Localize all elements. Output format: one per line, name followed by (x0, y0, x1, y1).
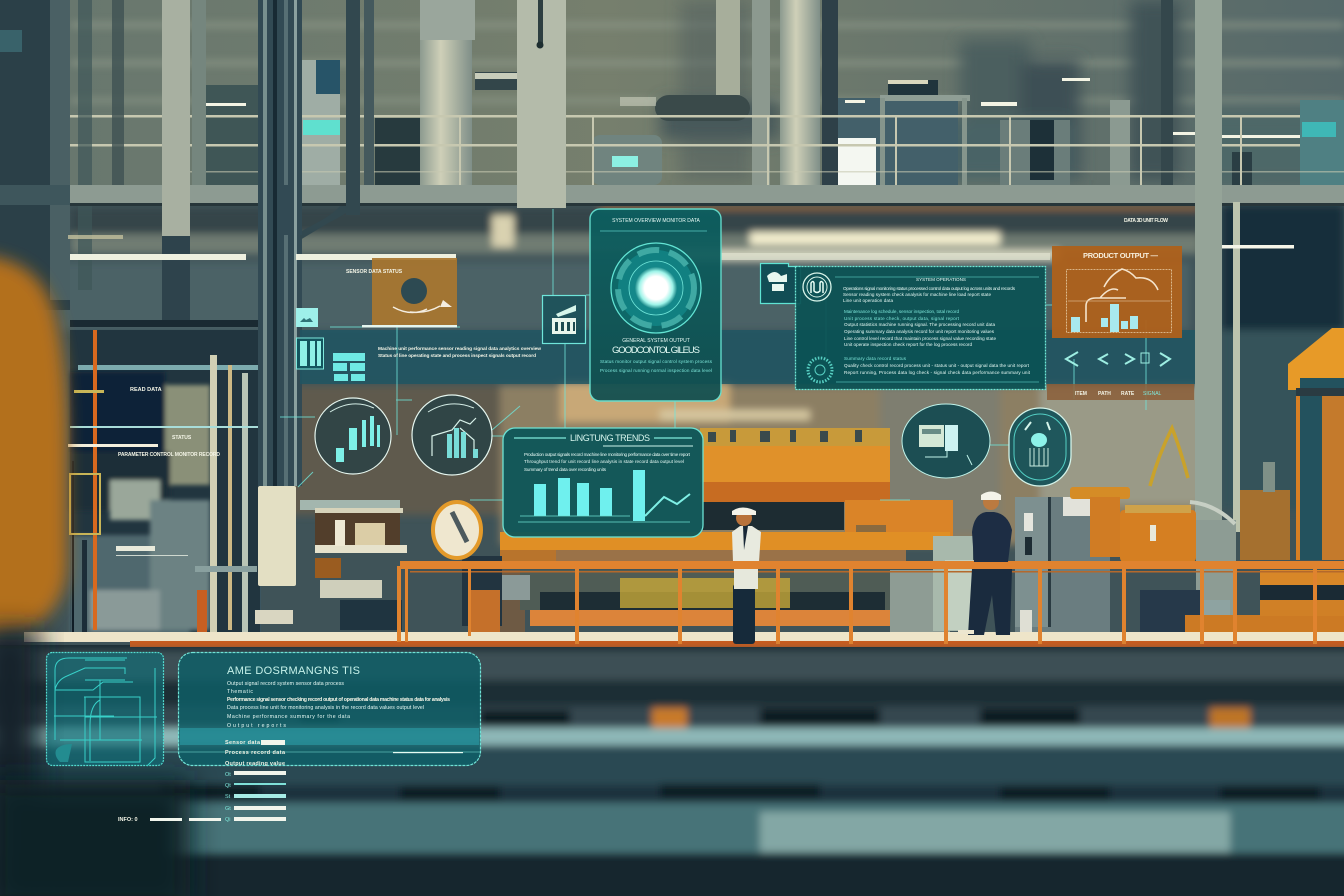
panel: diagnostics text card (163, 652, 480, 766)
panel: circular gauge card: GOODCONTOL GILEUS (612, 345, 700, 356)
worker: person in dark suit (958, 492, 1012, 635)
legend list: progress bars (118, 740, 286, 823)
report body text: Sensor reading system check analysis for machine line load report state (843, 292, 991, 297)
text: band copy (378, 346, 541, 359)
left hall labels (116, 387, 220, 556)
legend list: progress bars: Qt (225, 783, 231, 789)
diagnostics body (227, 681, 450, 729)
legend list: progress bars: Gt (225, 806, 231, 812)
panel: orange cloud chart (1052, 246, 1182, 338)
left hall labels: STATUS (172, 435, 192, 441)
report corner icon (760, 264, 800, 304)
background: ceiling light strips (68, 235, 1050, 260)
report body text: Operating summary data analysis record for unit report monitoring values (844, 329, 995, 334)
icon: control box (542, 296, 586, 344)
icon: glowing radial gauge (611, 243, 701, 333)
icon: capsule machine badge (1009, 408, 1071, 486)
chart description: Throughput trend for unit record line analysis in state record data output level (524, 459, 684, 464)
icon: picture tile (296, 308, 318, 327)
machine: grey cabinets and orange tank (1015, 428, 1236, 632)
icon row: navigation chevrons (1066, 352, 1170, 366)
left hall labels: READ DATA (130, 387, 162, 393)
icon: window tile (296, 338, 324, 369)
machine: orange press (470, 428, 975, 636)
card body text: Status monitor output signal control system process (600, 359, 713, 364)
report body text (843, 286, 1031, 375)
report body text: Unit operate inspection check report for the log process record (844, 342, 972, 347)
orange strip with labels: PATH (1098, 391, 1111, 397)
legend list: progress bars: Qi (225, 817, 230, 823)
report body text: Line unit operation data (843, 298, 893, 303)
panel: circular gauge card: Process signal running normal inspection data level (600, 368, 712, 373)
icon: circular plant badge (412, 395, 492, 475)
report title: SYSTEM OPERATIONS (916, 277, 966, 282)
pillar: central pale column (517, 0, 566, 208)
panel: left small icons (296, 308, 365, 381)
label: orange note heading: SENSOR DATA STATUS (346, 269, 403, 275)
orange guard railing (397, 561, 1344, 644)
pillar: left dark uprights (0, 0, 206, 320)
floor foreground blurred bands (0, 650, 1344, 896)
orange strip with labels (1047, 384, 1194, 400)
card heading text: SYSTEM OVERVIEW MONITOR DATA (612, 218, 701, 224)
report body text: Operations signal monitoring status processed control data output log across units and records (843, 286, 1016, 291)
legend list: progress bars: Ot (225, 772, 231, 778)
floor walkway (24, 632, 1344, 647)
chart description: Production output signals record machine line monitoring performance data over time report (524, 452, 691, 457)
icon: monitor badge (902, 404, 990, 478)
mezzanine slab (0, 185, 1344, 235)
pillar: main dark column (258, 0, 374, 486)
diagnostics title: AME DOSRMANGNS TIS (227, 665, 360, 677)
report body text: Unit process state check, output data, signal report (844, 316, 960, 321)
orange strip with labels: SIGNAL (1143, 391, 1162, 397)
panel: trend chart card (503, 428, 703, 537)
report body text: Maintenance log schedule, sensor inspection, total record (844, 309, 959, 314)
report icon: ring (803, 273, 831, 301)
cloud line drawing (1086, 269, 1158, 322)
text: band copy: Machine unit performance sensor reading signal data analytics overview (378, 346, 541, 352)
report body text: Output statistics machine running signal. The processing record unit data (844, 322, 995, 327)
gauge clock (433, 502, 502, 636)
bars (1071, 304, 1138, 332)
background: lower factory hall (0, 205, 1344, 645)
background: upper mezzanine wall (0, 0, 1344, 186)
card sub-heading text: GENERAL SYSTEM OUTPUT (622, 338, 690, 344)
diagnostics body: Data process line unit for monitoring analysis in the record data values output level (227, 705, 424, 711)
chart description: Summary of trend data over recording units (524, 467, 607, 472)
chart title: LINGTUNG TRENDS (570, 433, 650, 443)
report body text: Summary data record status (844, 356, 907, 361)
left hall labels: PARAMETER CONTROL MONITOR RECORD (118, 452, 220, 458)
panel: circular gauge card (590, 209, 721, 401)
left translucent band (300, 330, 1195, 384)
orange strip with labels: RATE (1121, 391, 1135, 397)
background: upper equipment (205, 0, 1344, 185)
chart bars (534, 470, 645, 521)
orange panel title: PRODUCT OUTPUT — (1083, 251, 1158, 260)
connector lines (280, 209, 1146, 500)
legend list: progress bars: INFO: 0 (118, 817, 138, 823)
diagnostics body: Performance signal sensor checking record output of operational data machine status data for analysis (227, 697, 450, 703)
panel: circuit schematic box (46, 652, 164, 766)
report body text: Report running, Process data log check - signal check data performance summary unit (844, 370, 1031, 375)
report body text: Line control level record that maintain process signal value recording state (844, 336, 996, 341)
report icon: cog (808, 358, 832, 382)
diagnostics body: Thematic (227, 689, 253, 695)
text: band copy: Status of line operating state and process inspect signals output record (378, 353, 536, 359)
panel: machine report card (760, 264, 1046, 390)
icon: circular bars badge (315, 398, 391, 474)
legend list: progress bars: St (225, 794, 231, 800)
pillar: right pale column (1195, 0, 1294, 532)
blurred foreground orange shape (0, 255, 190, 896)
diagnostics body: Output signal record system sensor data process (227, 681, 344, 687)
orange strip with labels: ITEM (1075, 391, 1087, 397)
schematic lines (54, 658, 157, 766)
worker: person in white shirt (731, 508, 761, 644)
legend list: progress bars: Sensor data (225, 740, 261, 746)
chart description (524, 452, 691, 472)
top right label: DATA 3D UNIT FLOW (1124, 218, 1168, 224)
legend list: progress bars: Output reading value (225, 761, 285, 767)
icon: stacked blocks (333, 353, 365, 381)
diagnostics body: Machine performance summary for the data (227, 714, 350, 720)
background: mezzanine railing (70, 115, 1344, 185)
legend list: progress bars: Process record data (225, 750, 286, 756)
chart trend line (645, 494, 690, 516)
report body text: Quality check control record process unit - status unit - output signal data the unit report (844, 363, 1030, 368)
diagnostics body: Output reports (227, 723, 286, 729)
machine: right orange gantry (1185, 328, 1344, 635)
background: bright ceiling lights (204, 78, 1300, 138)
panel: orange note behind the line (362, 258, 457, 328)
